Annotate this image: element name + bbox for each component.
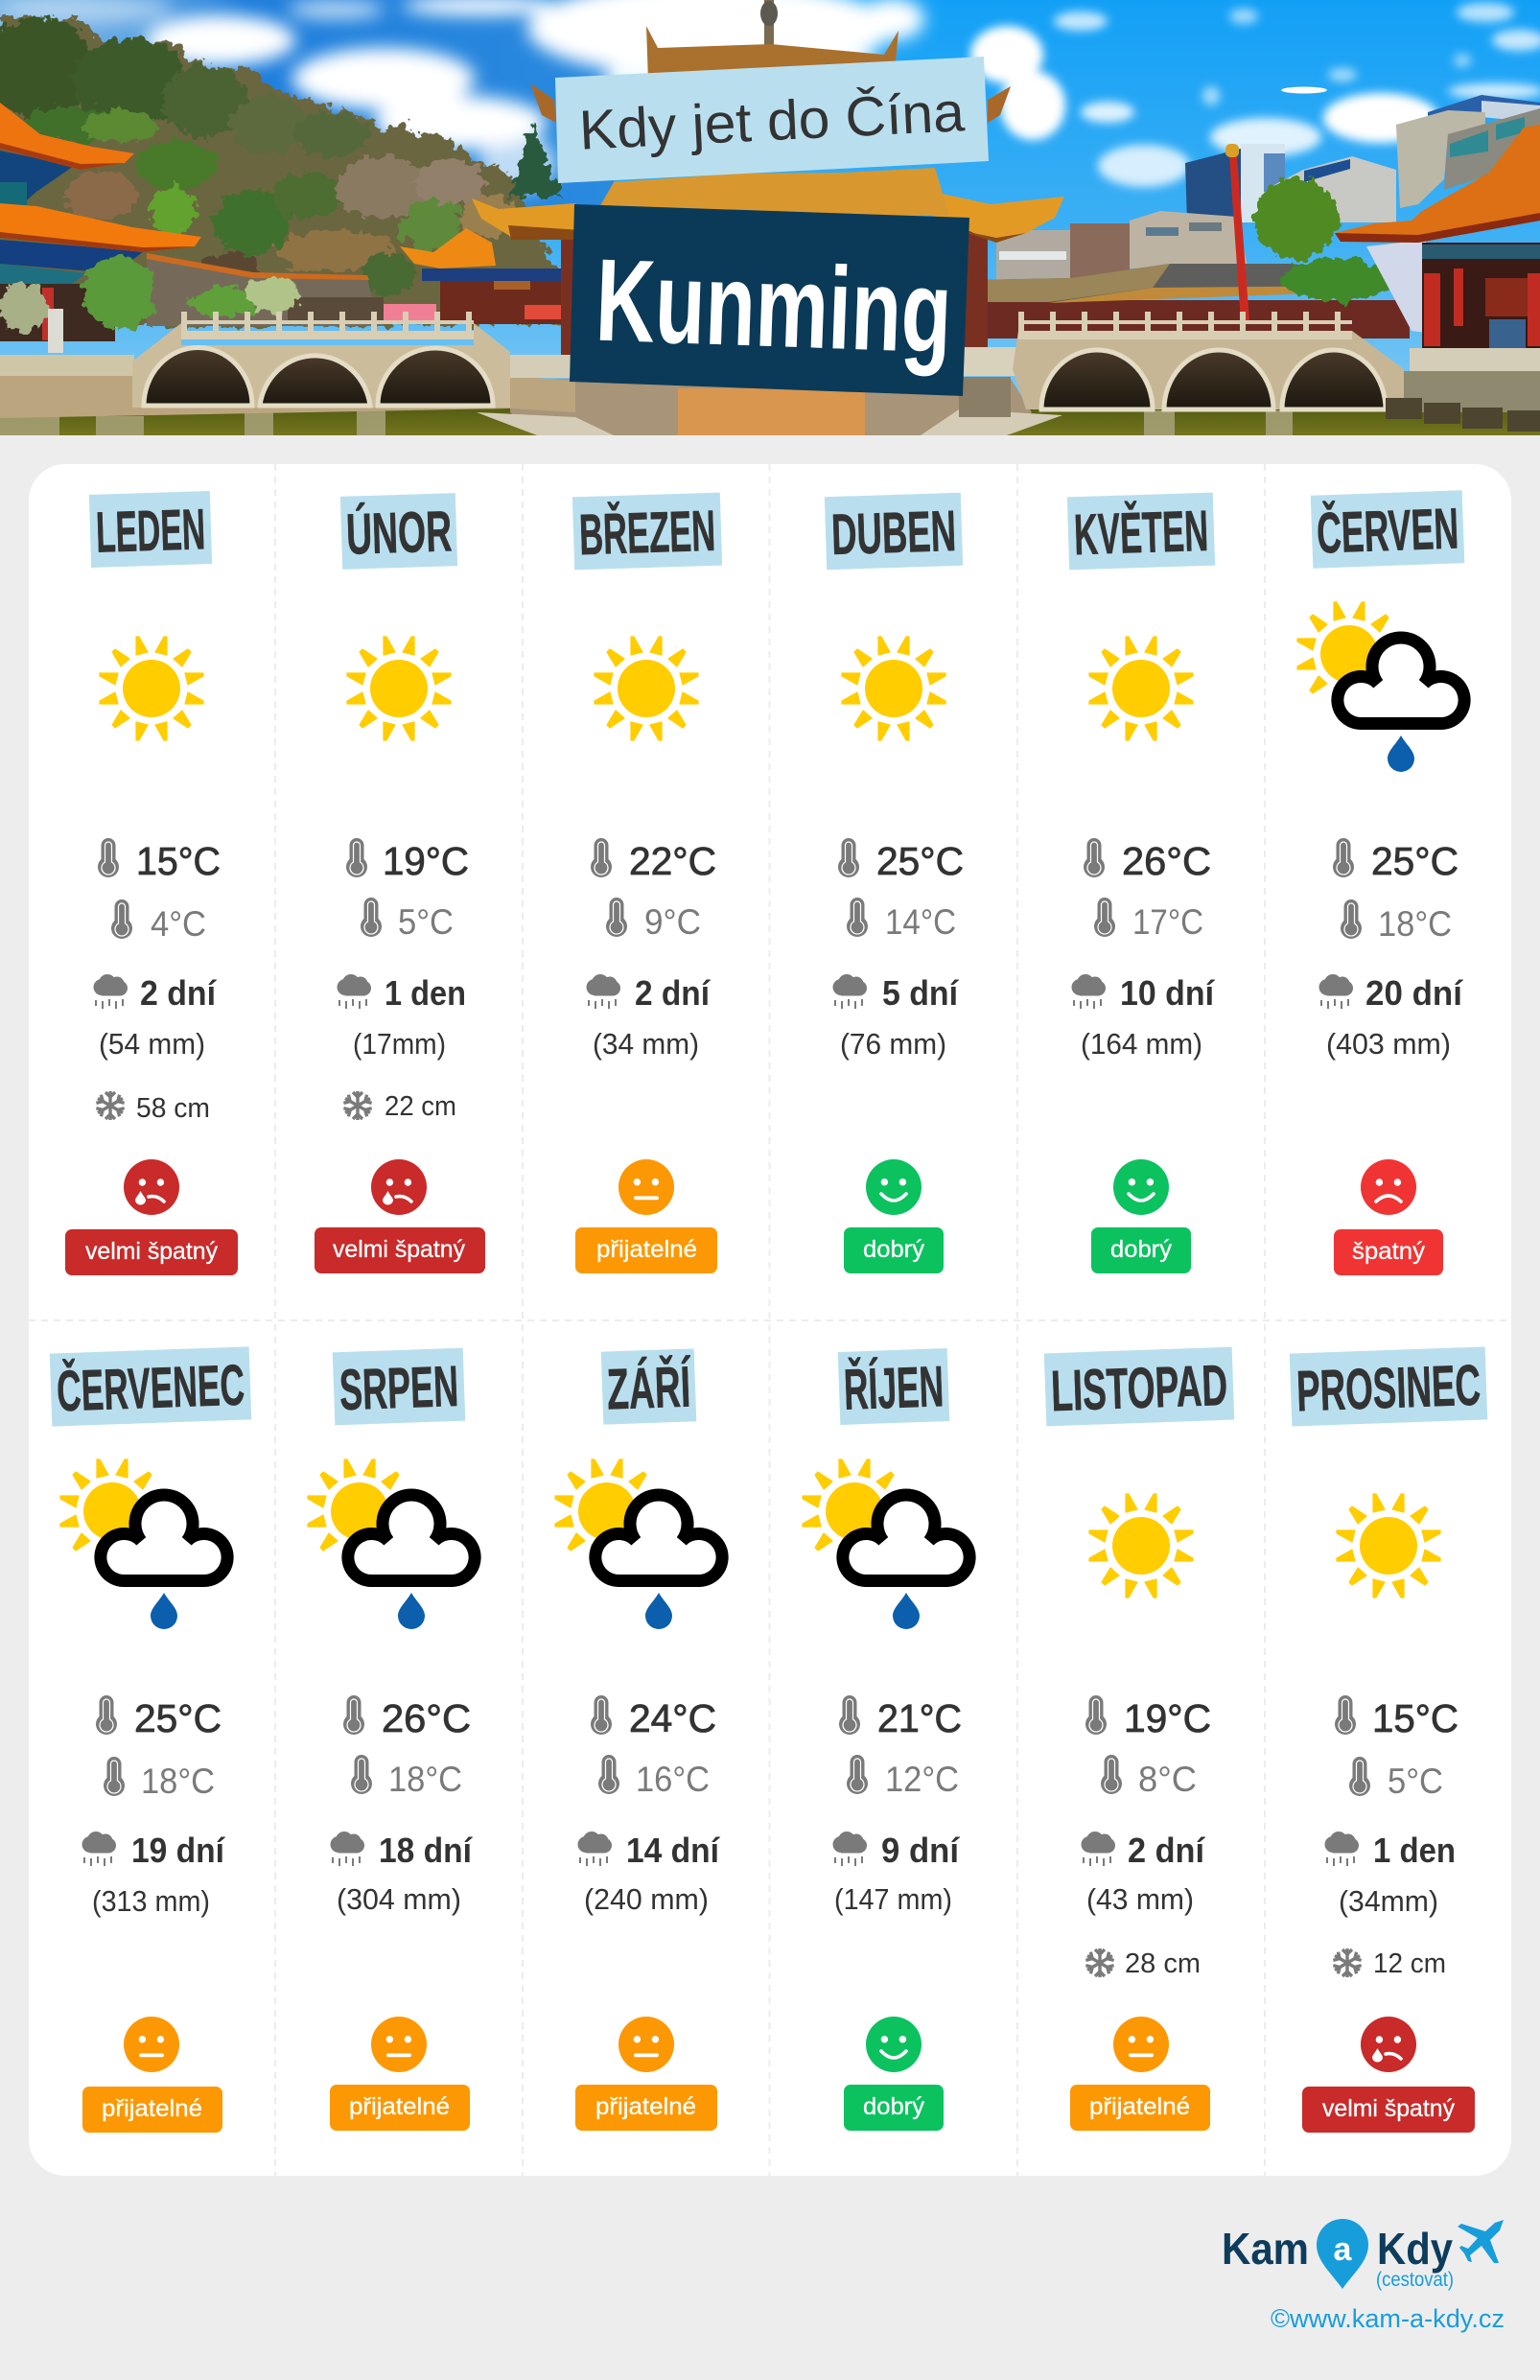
month: BŘEZEN [572,493,722,1273]
month: KVĚTEN [1067,493,1215,1273]
rating face [124,1159,179,1215]
rating badge: dobrý [863,2093,925,2120]
month: PROSINEC [1290,1346,1487,2133]
rating face [1361,2017,1416,2072]
month: LISTOPAD [1044,1347,1234,2131]
rain days [1072,973,1215,1013]
rating badge [1302,2087,1475,2133]
rating badge [844,1227,944,1273]
rain days [1082,1831,1205,1870]
rating face [124,2017,179,2072]
rain days [832,973,959,1013]
low temperature: 8°C [1138,1760,1197,1799]
rating face [866,1159,922,1215]
month label [1067,493,1215,570]
month: DUBEN [825,493,964,1273]
high temperature [343,1695,471,1740]
rating face [1361,1159,1416,1215]
low temperature [1094,898,1203,942]
high temperature: 24°C [629,1696,716,1740]
precipitation: (76 mm) [840,1027,946,1061]
rating badge [575,2085,717,2131]
left bridge [0,320,575,418]
title label: Kunming: Kunming [594,235,954,377]
logo: Kam a Kdy [1222,2219,1504,2291]
month label [333,1348,465,1425]
rating badge: přijatelné [102,2095,202,2122]
low temperature: 9°C [644,902,701,942]
low temperature [1341,899,1452,944]
month: LEDEN [65,491,238,1275]
rain days: 1 den [385,973,466,1013]
tree [1254,178,1392,301]
right pavilion [1366,240,1426,333]
high temperature [839,1695,962,1740]
weather icon: sun [1089,1494,1193,1598]
month label [838,1348,949,1425]
low temperature [1101,1755,1197,1799]
low temperature [361,898,454,942]
snow: 12 cm [1373,1948,1446,1979]
title label: Kdy jet do Čína: Kdy jet do Čína [577,81,967,162]
rating badge: přijatelné [595,2093,696,2120]
high temperature: 19°C [1124,1696,1211,1740]
rating badge [65,1229,238,1275]
rating badge: dobrý [1110,1236,1173,1263]
rating badge [1070,2085,1210,2131]
weather icon: sun [595,637,698,740]
rating badge [1334,1229,1443,1275]
high temperature [1335,1695,1458,1740]
month label: LISTOPAD [1050,1353,1228,1423]
month label [601,1348,696,1425]
high temperature [346,838,469,883]
weather icon: sun and rain cloud [803,1459,969,1629]
rain days: 10 dní [1120,973,1215,1013]
month label: SRPEN [338,1354,459,1422]
low temperature [351,1755,462,1799]
rain days [1319,973,1463,1013]
rating face [1113,1159,1169,1215]
high temperature: 25°C [876,839,964,883]
precipitation: (240 mm) [584,1882,709,1916]
high temperature: 26°C [382,1696,471,1740]
precipitation: (313 mm) [92,1884,210,1918]
snow [1333,1948,1446,1979]
high temperature [591,838,716,883]
rating badge [330,2085,470,2131]
temple base [510,379,1032,435]
distant city [996,95,1540,283]
rain days: 14 dní [626,1831,720,1870]
low temperature: 14°C [885,902,956,942]
high temperature [96,1695,222,1740]
rating face [618,1159,674,1215]
rain days [832,1831,960,1870]
high temperature [1084,838,1211,883]
rating badge: přijatelné [349,2093,450,2120]
low temperature: 12°C [885,1760,959,1799]
weather icon: sun and rain cloud [555,1459,722,1629]
high temperature [591,1695,716,1740]
high temperature: 15°C [1372,1696,1458,1740]
low temperature: 4°C [151,904,206,944]
precipitation: (17mm) [353,1027,446,1061]
month: ÚNOR [315,493,485,1273]
high temperature [1085,1695,1211,1740]
grey roof hall [973,300,1410,338]
snow [343,1091,456,1122]
rain days: 1 den [1373,1831,1456,1870]
pine tree [508,125,561,197]
left background buildings [147,256,384,326]
hero photo: Kunming temple and bridges [0,0,1540,435]
weather icon: sun [1337,1494,1440,1598]
low temperature [847,898,956,942]
rating badge: špatný [1352,1238,1426,1265]
month: ČERVEN [1297,490,1464,1275]
rating badge [844,2085,944,2131]
low temperature [111,899,206,944]
low temperature: 16°C [636,1760,710,1799]
month label: ČERVENEC [56,1353,245,1423]
high temperature: 19°C [383,839,469,883]
snow: 58 cm [136,1093,210,1124]
precipitation: (43 mm) [1086,1882,1194,1916]
high temperature [98,838,221,883]
high temperature: 25°C [1371,839,1458,883]
rain days: 5 dní [882,973,959,1013]
month label [1311,490,1464,569]
left pavilion [0,151,72,199]
rating badge: dobrý [863,1236,925,1263]
logo: Kam a Kdy: Kdy [1377,2224,1453,2274]
low temperature [606,898,701,942]
low temperature: 18°C [1378,904,1452,944]
rain days [1325,1831,1456,1870]
precipitation: (34mm) [1339,1884,1438,1918]
snow: 22 cm [385,1091,456,1122]
rating badge: velmi špatný [1322,2095,1455,2122]
snow [1085,1948,1201,1979]
high temperature [1333,838,1458,883]
rating badge: velmi špatný [333,1236,465,1263]
title label: Kunming [570,204,969,396]
low temperature: 17°C [1132,902,1203,942]
rain days: 20 dní [1365,973,1463,1013]
rating badge [315,1227,485,1273]
rating face [866,2017,922,2072]
low temperature [1349,1757,1443,1801]
rain days [338,973,466,1013]
water [0,408,1540,435]
month label: DUBEN [830,499,957,567]
month label [1044,1347,1234,1426]
rating badge: přijatelné [1089,2093,1190,2120]
month label [89,491,212,568]
month label: LEDEN [95,497,206,565]
month: ZÁŘÍ [555,1348,722,2131]
low temperature: 5°C [1388,1762,1443,1801]
precipitation: (34 mm) [593,1027,699,1061]
high temperature: 22°C [629,839,716,883]
month label [50,1346,251,1427]
high temperature: 26°C [1122,839,1211,883]
snow: 28 cm [1125,1948,1201,1979]
weather icon: sun [1089,637,1193,740]
low temperature: 18°C [388,1760,462,1799]
rain days: 2 dní [635,973,711,1013]
low temperature: 5°C [398,902,454,942]
low temperature: 18°C [141,1762,215,1801]
logo: Kam a Kdy: Kam [1222,2224,1309,2274]
rating badge: přijatelné [596,1236,697,1263]
month label: ÚNOR [345,499,453,567]
red pole [1229,156,1249,321]
rain days [82,1831,225,1870]
weather icon: sun and rain cloud [60,1459,227,1629]
precipitation: (147 mm) [834,1882,952,1916]
precipitation: (304 mm) [337,1882,461,1916]
month label [572,493,722,570]
weather icon: sun and rain cloud [308,1459,475,1629]
website credit: ©www.kam-a-kdy.cz [1271,2304,1505,2333]
rating face [1113,2017,1169,2072]
logo: Kam a Kdy: (cestovat) [1376,2269,1454,2291]
low temperature [598,1755,710,1799]
month: SRPEN [308,1348,475,2131]
icon: location pin [1317,2219,1368,2289]
high temperature: 21°C [877,1696,962,1740]
rain days: 19 dní [131,1831,225,1870]
rain days [330,1831,473,1870]
month label [340,493,457,570]
snow [96,1091,210,1124]
rain days: 18 dní [379,1831,473,1870]
high temperature: 25°C [134,1696,222,1740]
rain days: 9 dní [881,1831,960,1870]
title label: Kdy jet do Čína [555,57,989,183]
rain days: 2 dní [1128,1831,1205,1870]
central temple [764,0,774,48]
rating badge [575,1227,717,1273]
high temperature: 15°C [136,839,221,883]
icon: plane [1458,2220,1504,2263]
rating badge [1091,1227,1191,1273]
wooded hill [0,16,566,326]
rating face [618,2017,674,2072]
rating face [371,1159,427,1215]
rain days [577,1831,720,1870]
weather icon: sun [347,637,451,740]
month label: ZÁŘÍ [606,1354,692,1421]
weather icon: sun [100,637,203,740]
precipitation: (403 mm) [1326,1027,1451,1061]
rain days [587,973,711,1013]
right bridge [959,320,1540,432]
rating face [371,2017,427,2072]
month label: KVĚTEN [1073,499,1209,567]
month label: BŘEZEN [578,499,716,567]
weather icon: sun and rain cloud [1297,602,1464,772]
low temperature [104,1757,215,1801]
month: ČERVENEC [50,1346,251,2133]
rating badge: velmi špatný [85,1238,218,1265]
rain days: 2 dní [140,973,217,1013]
precipitation: (164 mm) [1081,1027,1202,1061]
month label: ŘÍJEN [843,1354,945,1422]
rating badge [82,2087,222,2133]
month: ŘÍJEN [803,1348,969,2131]
weather icon: sun [842,637,945,740]
icon: location pin: a [1334,2231,1353,2268]
low temperature [847,1755,959,1799]
high temperature [838,838,964,883]
panel: month calendar card [29,464,1511,2176]
precipitation: (54 mm) [99,1027,205,1061]
month label [825,493,963,570]
rain days [94,973,217,1013]
